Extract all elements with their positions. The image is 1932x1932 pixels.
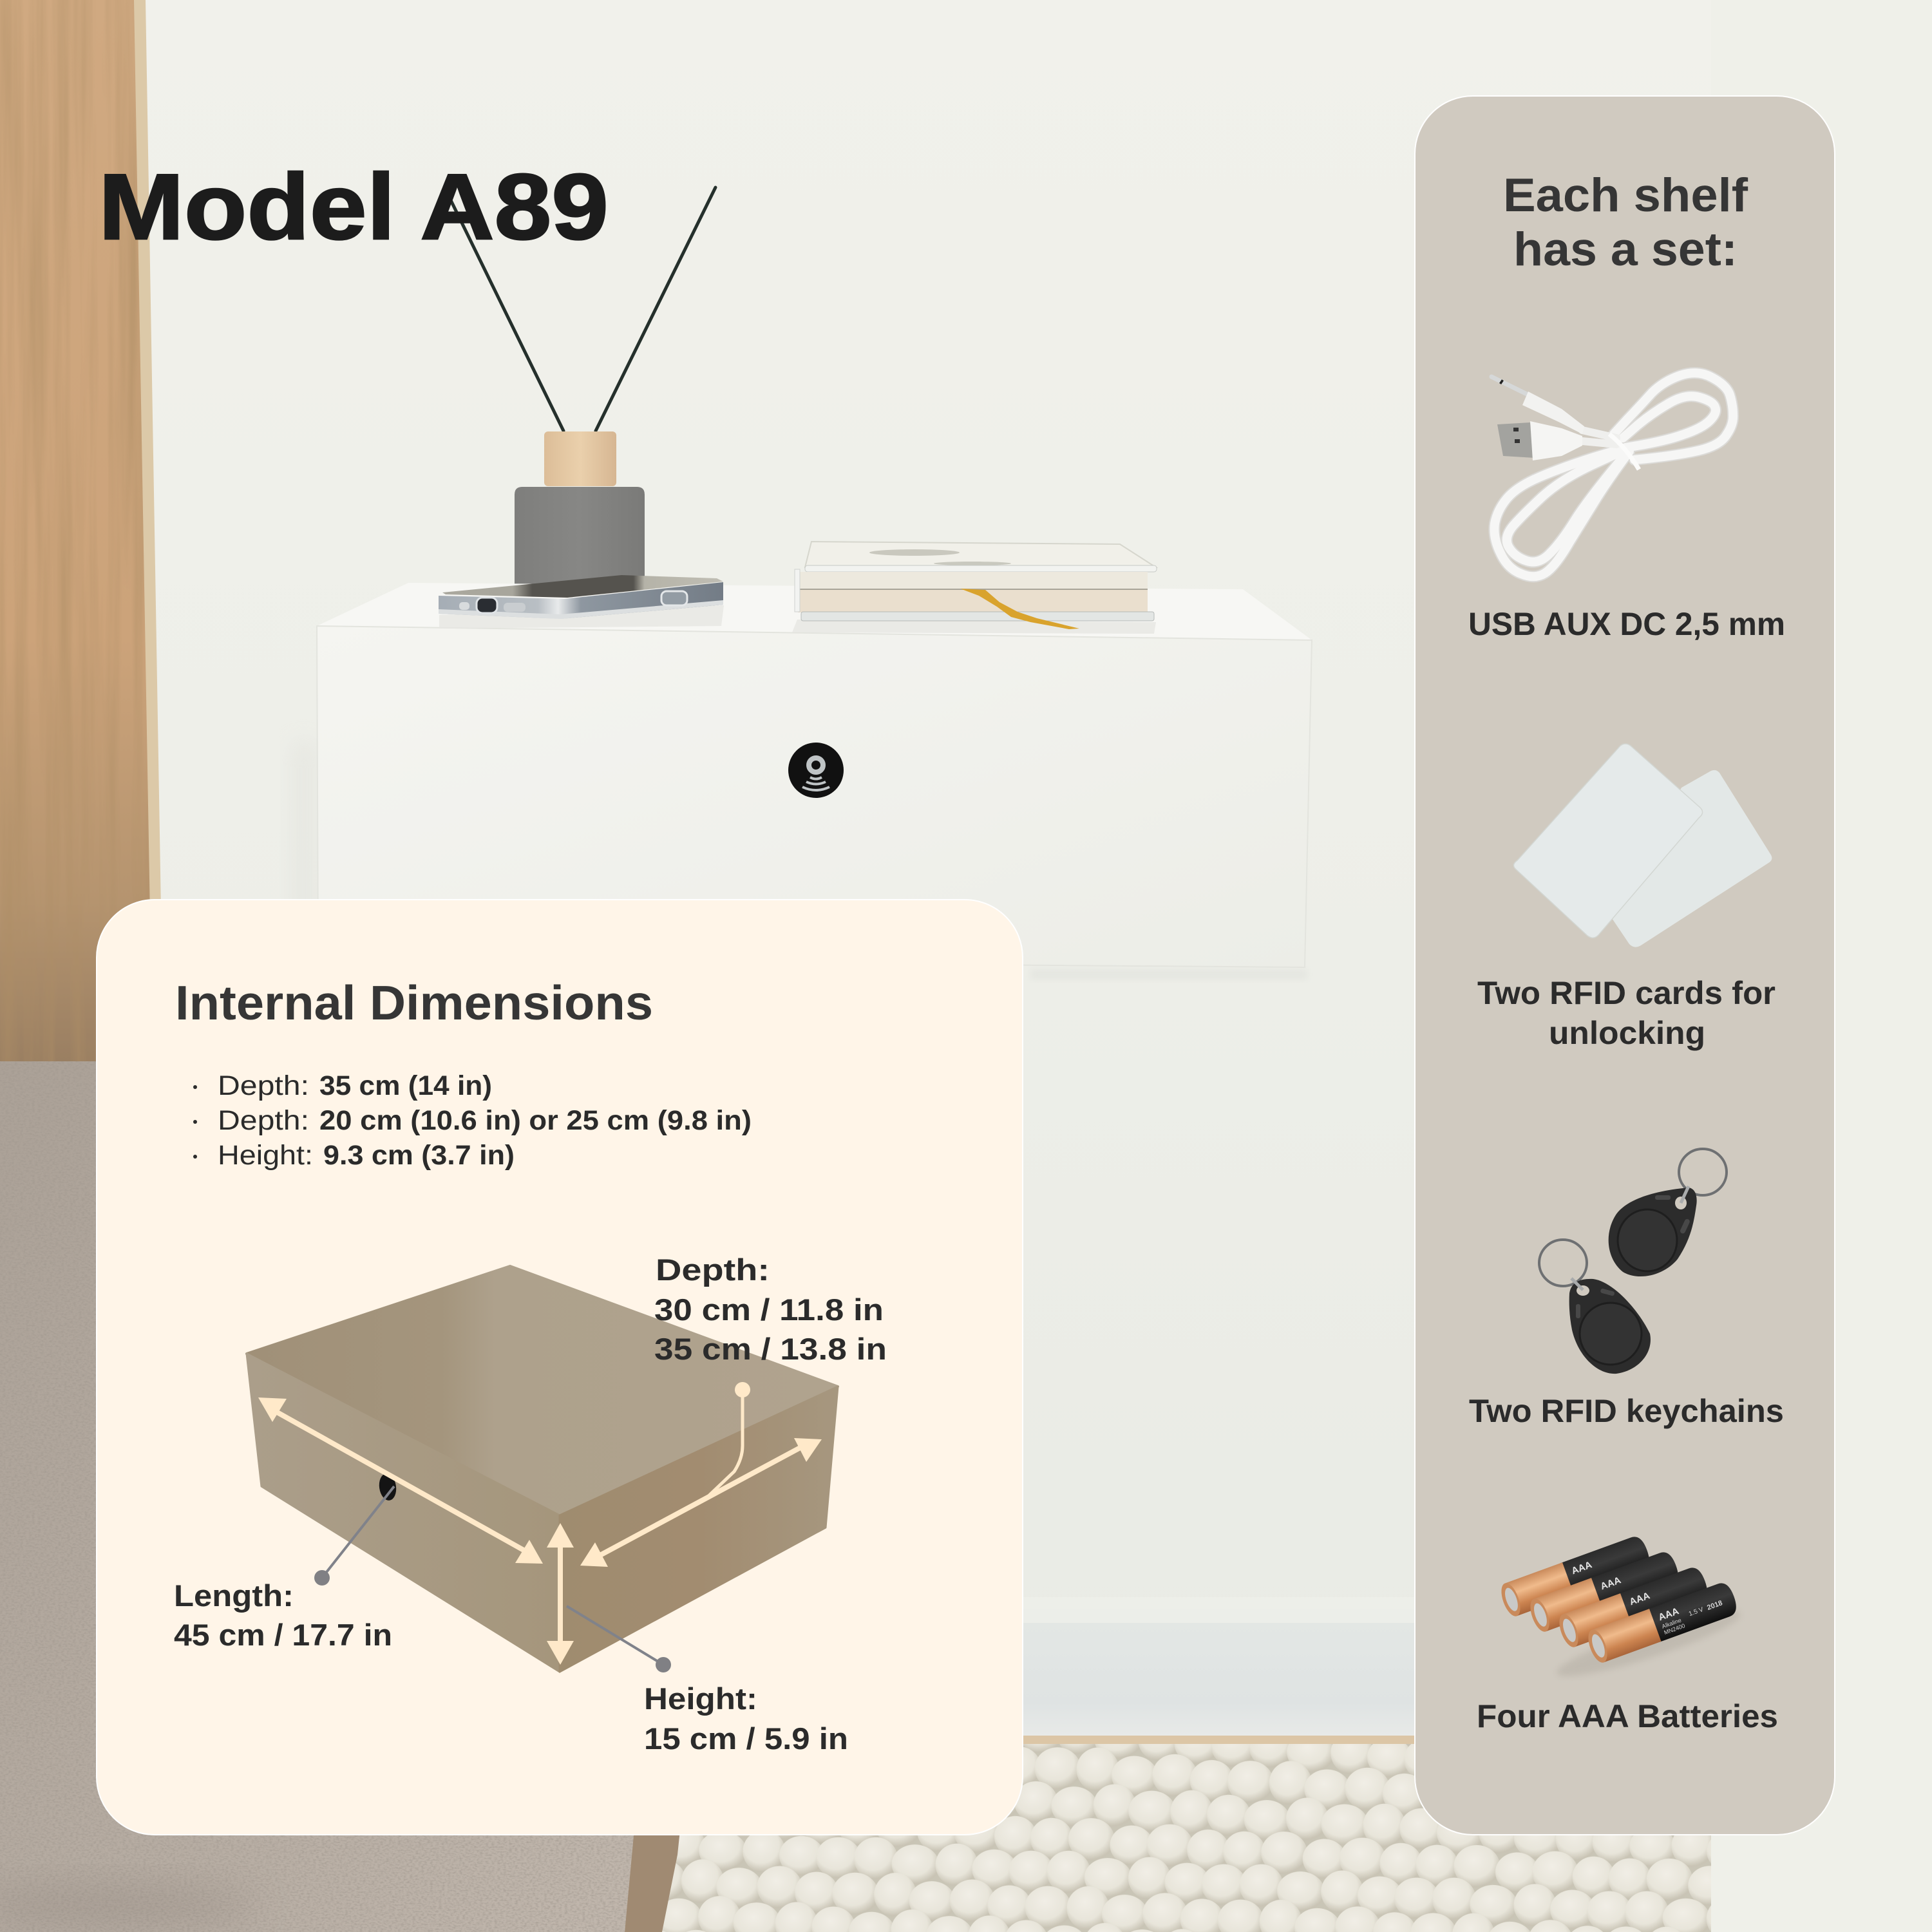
label: keychains: Two RFID keychains — [1469, 1393, 1784, 1429]
battery 4: 1.5 V — [1688, 1606, 1705, 1618]
grey vase — [515, 487, 645, 587]
title: Model A89 — [99, 155, 609, 259]
length leader — [314, 1486, 394, 1586]
label: height: 15 cm / 5.9 in — [644, 1721, 848, 1756]
arrow: height — [547, 1523, 574, 1665]
battery 3: AAA — [1628, 1590, 1651, 1607]
ports — [459, 591, 687, 613]
sofa — [0, 1061, 638, 1932]
upper key ring — [1679, 1149, 1727, 1195]
box left face — [247, 1354, 560, 1672]
heading — [1503, 169, 1748, 276]
battery 1: AAA — [1570, 1559, 1593, 1577]
baseboard — [902, 1597, 1711, 1737]
lock on box — [377, 1472, 398, 1502]
panel: each shelf has a set — [1415, 96, 1835, 1835]
phone side — [439, 582, 723, 619]
label: depth: 35 cm / 13.8 in — [654, 1332, 887, 1366]
lower key fob — [1569, 1278, 1651, 1374]
book — [795, 542, 1157, 629]
smartphone — [439, 575, 723, 619]
floor strip — [625, 1736, 1711, 1932]
label: depth: Depth: — [656, 1253, 770, 1287]
label: length: 45 cm / 17.7 in — [174, 1618, 392, 1652]
depth leader — [708, 1382, 750, 1496]
rug — [662, 1744, 1711, 1932]
label: height: Height: — [644, 1681, 757, 1716]
label: RFID cards: Two RFID cards for — [1477, 975, 1776, 1011]
book back cover — [801, 612, 1154, 621]
battery 4: MN2400 — [1663, 1622, 1686, 1636]
panel background — [1415, 96, 1835, 1835]
label: length — [174, 1578, 392, 1652]
3D box diagram — [247, 1266, 838, 1672]
shelf top — [317, 583, 1312, 640]
label: depth — [654, 1253, 887, 1366]
battery 2: AAA — [1599, 1575, 1622, 1592]
NFC lock badge — [788, 743, 844, 798]
battery 4 — [1584, 1580, 1740, 1665]
label: USB AUX: USB AUX DC 2,5 mm — [1468, 606, 1785, 642]
label: batteries: Four AAA Batteries — [1477, 1698, 1778, 1734]
battery 2 — [1526, 1549, 1682, 1634]
DC jack — [1492, 377, 1584, 434]
panel background — [97, 900, 1023, 1835]
arrow: depth — [580, 1438, 822, 1567]
cable loops — [1494, 373, 1733, 576]
bookmark ribbon — [960, 589, 1079, 629]
icon: RFID cards — [1513, 744, 1772, 947]
phone screen — [442, 575, 723, 598]
upper key fob — [1609, 1186, 1697, 1276]
box right face — [560, 1387, 838, 1672]
shelf front — [317, 626, 1312, 967]
battery 4: AAA — [1657, 1605, 1680, 1623]
bullet list: Depth: — [218, 1105, 309, 1136]
reed sticks — [451, 187, 715, 431]
icon: RFID keychains — [1539, 1149, 1727, 1374]
bullet list: Depth: — [218, 1070, 309, 1101]
panel: internal dimensions — [97, 900, 1023, 1835]
battery 3 — [1555, 1565, 1711, 1649]
wood door frame — [0, 0, 164, 1061]
front card — [1513, 744, 1703, 938]
label: length: Length: — [174, 1578, 294, 1613]
heading: Internal Dimensions — [175, 976, 653, 1030]
heading: has a set: — [1513, 223, 1738, 276]
back card — [1611, 770, 1772, 947]
bullet list: 9.3 cm (3.7 in) — [323, 1140, 515, 1171]
shelf shadows on wall — [293, 741, 1307, 980]
lower key ring — [1539, 1240, 1587, 1286]
bullet list: 35 cm (14 in) — [319, 1070, 492, 1101]
light strip on right edge — [1711, 0, 1932, 1932]
bullet list: 20 cm (10.6 in) or 25 cm (9.8 in) — [319, 1105, 752, 1136]
box top face — [247, 1266, 838, 1515]
bullet list: Height: — [218, 1140, 313, 1171]
white floating shelf — [293, 583, 1312, 980]
book pages — [798, 572, 1148, 612]
USB plug — [1497, 421, 1582, 460]
battery 4: Alkaline — [1661, 1617, 1682, 1630]
heading: Each shelf — [1503, 169, 1748, 222]
reed diffuser — [451, 187, 715, 587]
cable tie — [1609, 434, 1639, 469]
reflections on shelf top — [439, 605, 1156, 634]
battery 4: 2018 — [1706, 1599, 1723, 1612]
battery 1 — [1497, 1534, 1653, 1618]
label: RFID cards — [1477, 975, 1776, 1051]
arrow: length — [258, 1397, 543, 1564]
label: RFID cards: unlocking — [1549, 1015, 1705, 1051]
icon: AAA batteries — [1497, 1534, 1745, 1687]
wooden cap — [544, 431, 616, 486]
height leader — [567, 1606, 671, 1672]
label: height — [644, 1681, 848, 1756]
label: depth: 30 cm / 11.8 in — [654, 1293, 884, 1327]
book cover top — [805, 542, 1156, 567]
icon: USB AUX cable — [1492, 373, 1733, 576]
bullet list — [193, 1070, 752, 1171]
